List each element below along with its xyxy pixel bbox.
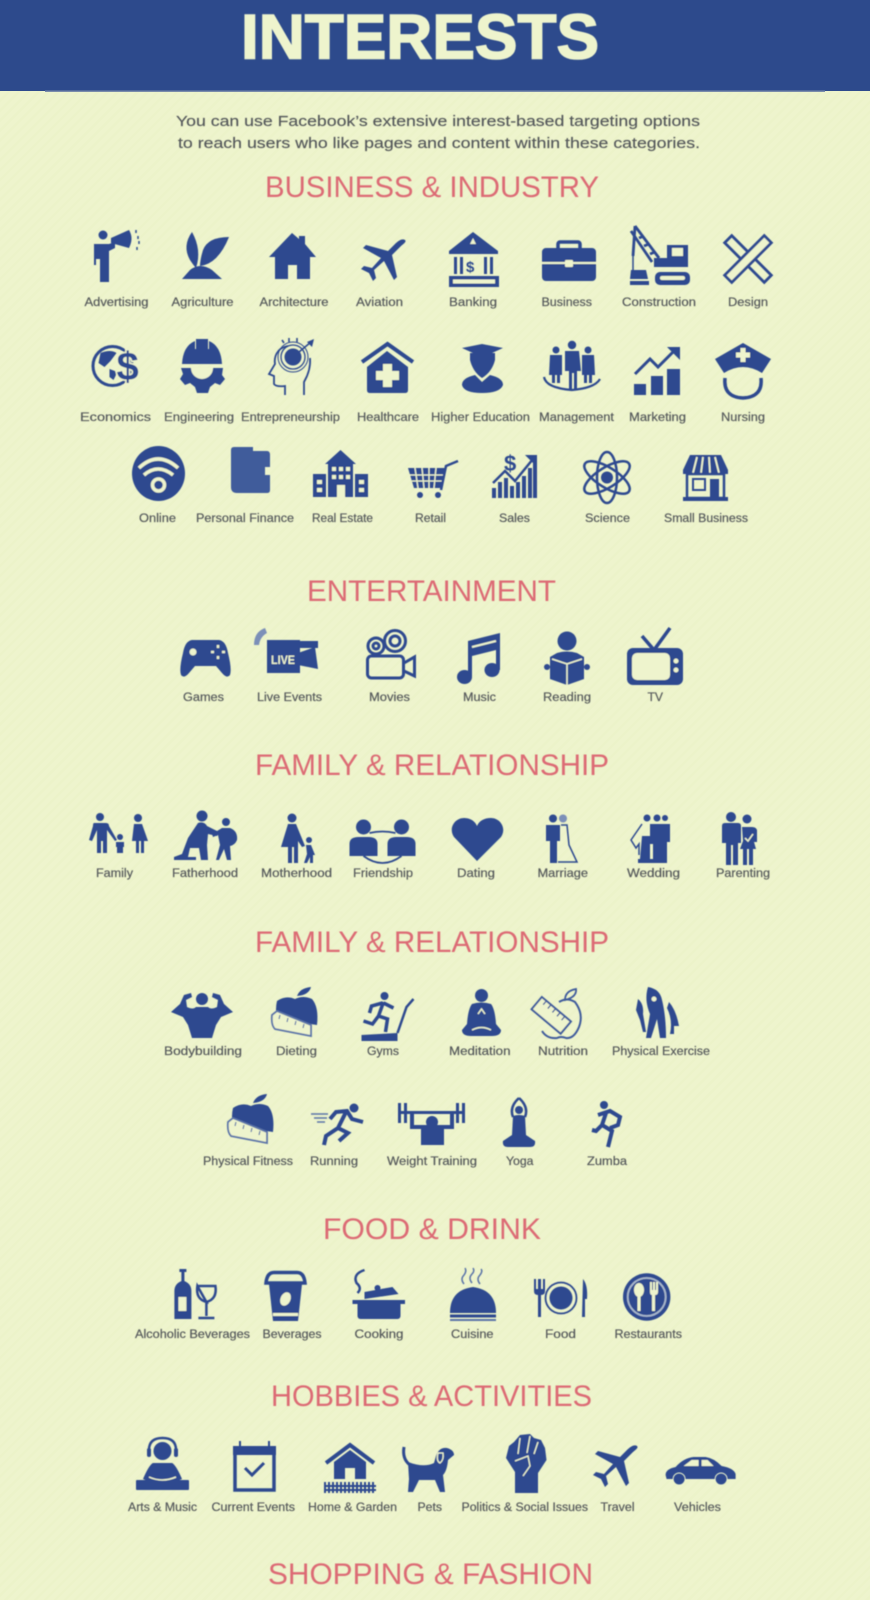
icon: buildings [313,450,368,497]
icon: meditating figure [462,989,501,1036]
intro text: to reach users who like pages and content within these categories. [178,135,700,152]
icon: apple and tape [228,1094,273,1143]
label: TV [648,692,663,704]
label: Politics & Social Issues [462,1502,588,1514]
label: Current Events [212,1502,295,1514]
item: Architecture [260,233,328,309]
item: Engineering [164,339,234,424]
item: Zumba [587,1101,628,1168]
item: Restaurants [614,1273,682,1341]
item: Travel [593,1445,638,1514]
icon: bottle and glass [174,1269,216,1319]
label: Reading [543,692,591,704]
item: Nutrition [532,989,588,1058]
heading: FAMILY & RELATIONSHIP [255,926,609,959]
label: Management [539,412,615,424]
label: Entrepreneurship [241,412,340,424]
item: Economics [80,345,151,424]
item: Cooking [352,1270,405,1341]
label: Live Events [257,692,322,704]
icon: wallet [231,447,270,493]
icon: coffee cup [266,1272,305,1321]
icon: head with idea [269,338,314,395]
icon: megaphone [94,230,139,282]
icon: father and child [174,810,237,860]
label: Physical Fitness [203,1156,293,1168]
item: Science [580,452,634,525]
label: Nursing [721,412,765,424]
icon: dog [404,1447,454,1492]
label: Fatherhood [172,868,238,880]
label: Weight Training [387,1156,477,1168]
header band [0,0,870,91]
label: Games [183,692,224,704]
label: Parenting [716,868,770,880]
icon: sales chart: $ [504,451,516,476]
item: Pets [404,1447,454,1514]
label: Construction [622,297,696,309]
label: Higher Education [431,412,530,424]
item: Dating [452,818,503,880]
label: Agriculture [172,297,234,309]
label: Dieting [276,1046,317,1058]
icon: graduate [462,344,503,393]
icon: raised fist [506,1434,546,1493]
item: Beverages [262,1272,322,1341]
icon: apple outline and ruler [532,989,581,1038]
icon: crane [630,226,690,285]
icon: cooking pot [352,1270,405,1319]
icon: plane [593,1445,638,1487]
item: Personal Finance [196,447,294,525]
label: Cooking [354,1329,404,1341]
item: Sales [492,451,537,525]
label: Motherhood [261,868,332,880]
icon: person reading [544,632,590,685]
item: Movies [368,630,414,704]
label: Nutrition [538,1046,588,1058]
icon: yoga pose [503,1098,535,1147]
item: Business [542,242,596,309]
icon: bank: $ [466,259,475,276]
item: Politics and Social Issues [462,1434,588,1514]
label: Marketing [629,412,686,424]
item: Healthcare [357,344,419,424]
item: Dieting [272,987,317,1058]
label: Yoga [506,1156,534,1168]
label: Music [463,692,496,704]
label: Friendship [353,868,413,880]
icon: weightlifter [398,1103,465,1145]
item: Running [310,1104,363,1168]
icon: storefront [683,455,728,501]
label: Aviation [356,297,403,309]
item: Retail [408,461,458,525]
icon: apple and tape [272,987,317,1036]
label: Economics [80,412,151,424]
label: Meditation [449,1046,510,1058]
item: Management [539,341,615,424]
icon: house [269,233,316,279]
icon: dancer [592,1101,620,1147]
icon: house with fence [324,1445,376,1493]
label: Personal Finance [196,513,294,525]
label: Healthcare [357,412,419,424]
item: Parenting [716,812,770,880]
icon: nurse cap [715,343,771,398]
item: Music [457,633,500,704]
item: Cuisine [450,1268,496,1341]
item: Current Events [212,1441,295,1514]
label: Small Business [664,513,748,525]
heading: FOOD & DRINK [323,1213,541,1246]
heading: FAMILY & RELATIONSHIP [255,749,609,782]
label: Marriage [538,868,588,880]
item: Design [725,236,771,309]
icon: DJ with headphones [136,1438,189,1490]
item: Marriage [538,814,588,880]
label: Vehicles [674,1502,721,1514]
item: Weight Training [387,1103,477,1168]
label: Architecture [260,297,328,309]
item: Motherhood [261,814,332,880]
title: INTERESTS [241,2,599,72]
icon: heart [452,818,503,861]
item: Banking [449,232,499,309]
item: Alcoholic Beverages [135,1269,250,1341]
item: Advertising [84,230,148,309]
icon: hard hat and gear [180,339,225,393]
label: Cuisine [451,1329,494,1341]
label: Pets [418,1502,442,1514]
item: Online [132,446,185,525]
icon: calendar [233,1441,276,1490]
icon: wifi [132,446,185,501]
icon: shopping cart [408,461,458,498]
icon: exercising figures [636,987,679,1038]
item: Wedding [627,814,680,880]
label: Family [96,868,133,880]
item: Family [89,813,148,880]
item: Yoga [503,1098,535,1168]
item: Meditation [449,989,510,1058]
label: Home & Garden [308,1502,397,1514]
label: Running [310,1156,358,1168]
label: Bodybuilding [164,1046,242,1058]
icon: plant [182,232,229,279]
label: Zumba [587,1156,628,1168]
item: Aviation [356,239,406,309]
section: business and industry [80,171,771,525]
section: hobbies and activities [128,1380,736,1514]
label: Alcoholic Beverages [135,1329,250,1341]
label: Restaurants [614,1329,682,1341]
label: Banking [449,297,497,309]
label: Food [545,1329,576,1341]
item: Games [180,640,231,704]
item: Arts and Music [128,1438,197,1514]
icon: mother and child [281,814,315,863]
item: Entrepreneurship [241,338,340,424]
label: Gyms [367,1046,399,1058]
label: Sales [499,513,530,525]
label: Arts & Music [128,1502,197,1514]
icon: family [89,813,148,853]
label: Beverages [262,1329,322,1341]
label: Advertising [84,297,148,309]
label: Business [542,297,592,309]
label: Wedding [627,868,680,880]
section: shopping and fashion heading: SHOPPING & FASHION [268,1558,593,1591]
icon: treadmill runner [362,992,414,1041]
heading: HOBBIES & ACTIVITIES [271,1380,592,1413]
item: Bodybuilding [164,993,242,1058]
item: Physical Fitness [203,1094,293,1168]
icon: briefcase [542,242,596,281]
icon: restaurant badge [623,1273,670,1321]
icon: plate and cutlery [534,1279,587,1317]
item: Food [534,1279,587,1341]
item: Construction [622,226,696,309]
label: Movies [369,692,410,704]
icon: globe and dollar: $ [116,345,139,389]
heading: BUSINESS & INDUSTRY [265,171,599,204]
icon: plane [361,239,406,281]
section: food and drink [135,1213,682,1341]
icon: bride and groom [546,814,577,863]
icon: atom [580,452,634,503]
item: Small Business [664,455,748,525]
icon: muscular torso [171,993,233,1038]
label: Physical Exercise [612,1046,710,1058]
icon: parents [722,812,757,865]
icon: car [666,1457,736,1484]
label: Science [585,513,630,525]
icon: ruler and pencil [725,236,771,282]
item: Nursing [715,343,771,424]
item: Fatherhood [172,810,238,880]
label: Design [728,297,768,309]
label: Retail [415,513,446,525]
item: Higher Education [431,344,530,424]
label: Real Estate [312,513,373,525]
icon: television [627,628,683,685]
item: Marketing [629,347,686,424]
icon: live camera: LIVE [271,655,295,667]
item: Friendship [350,820,416,880]
icon: two friends [350,820,416,863]
icon: cloche [450,1268,496,1321]
item: Agriculture [172,232,234,309]
item: Gyms [362,992,414,1058]
item: Reading [543,632,591,704]
label: Dating [457,868,495,880]
item: Live Events [254,628,322,704]
section: entertainment [180,575,683,704]
icon: growth chart [634,347,680,395]
item: Real Estate [312,450,373,525]
icon: movie camera [368,630,414,678]
icon: wedding couple [631,814,670,863]
section: family and relationship [89,749,770,880]
item: Physical Exercise [612,987,710,1058]
label: Travel [600,1502,634,1514]
icon: team [544,341,600,390]
icon: game controller [180,640,231,677]
icon: music notes [457,633,500,684]
item: Home and Garden [308,1445,397,1514]
heading: ENTERTAINMENT [307,575,556,608]
item: TV [627,628,683,704]
label: Online [139,513,176,525]
section: fitness (second family and relationship heading) [164,926,710,1168]
label: Engineering [164,412,234,424]
item: Vehicles [666,1457,736,1514]
intro text: You can use Facebook’s extensive interest-based targeting options [176,113,700,130]
icon: medical house [362,344,413,393]
icon: runner [311,1104,363,1145]
intro text [176,113,700,152]
